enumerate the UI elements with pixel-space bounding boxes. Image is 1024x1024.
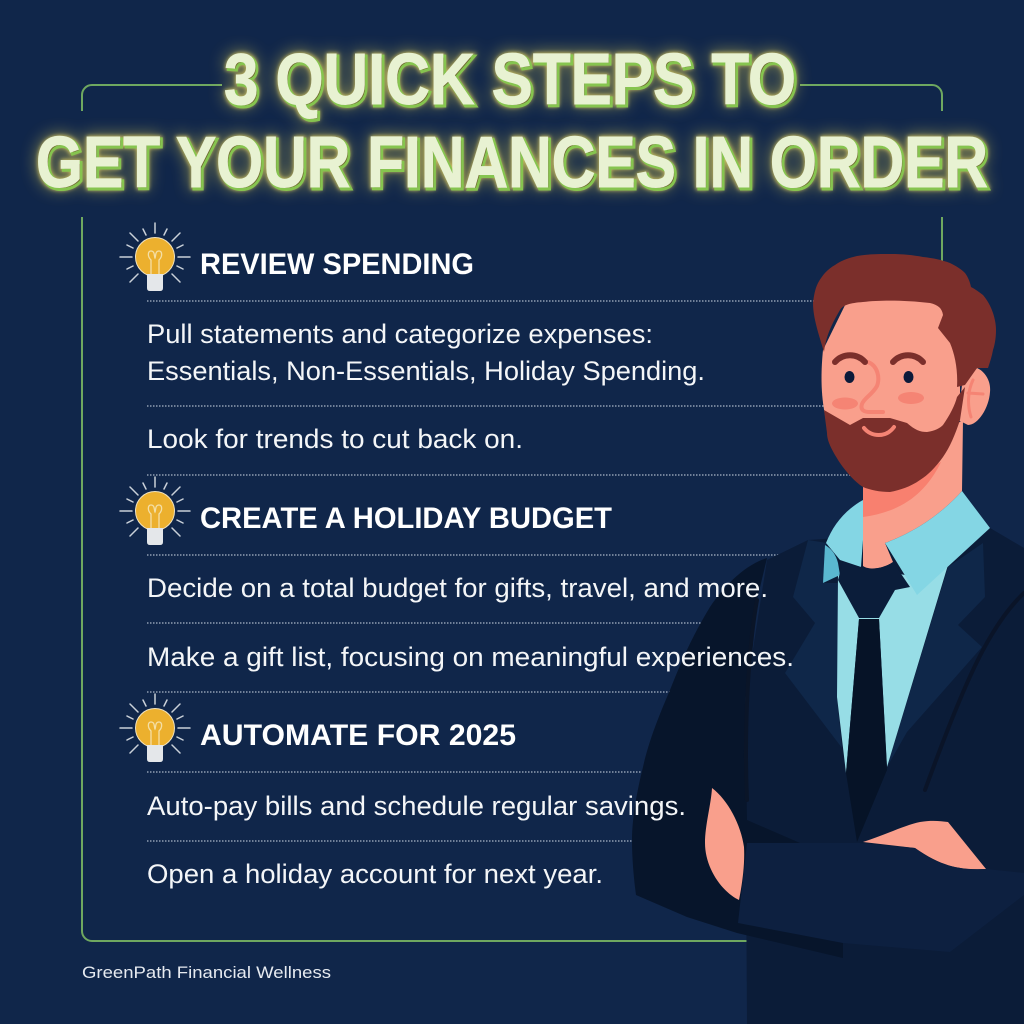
cheeks [832,392,924,410]
divider lines [147,301,880,841]
step 2 text: Decide on a total budget for gifts, travel, and more. [147,573,768,603]
hair [813,254,996,387]
content frame [82,85,942,941]
right hand [863,821,986,869]
suit seam lines [746,593,1024,800]
step 2 text [147,573,794,672]
step 2 heading: CREATE A HOLIDAY BUDGET [200,502,612,535]
step 1 text: Pull statements and categorize expenses: [147,319,653,349]
eyebrows [835,355,923,362]
title [36,40,990,205]
title: 3 QUICK STEPS TO [226,42,798,122]
step 1 text: Look for trends to cut back on. [147,424,523,454]
step 3 bulb icon [120,694,190,762]
neck shadow [863,462,941,517]
tie knot [838,562,910,618]
step 3 text [147,791,686,889]
forearm [738,843,1024,952]
eyes [844,371,914,383]
torso [745,528,1024,1024]
title: 3 QUICK STEPS TO [224,40,796,120]
face [822,295,960,460]
footer credit: GreenPath Financial Wellness [82,963,331,982]
neck [863,420,963,569]
left arm sleeve [632,558,843,958]
ear detail [968,380,983,417]
title: 3 QUICK STEPS TO [224,40,796,120]
man illustration [632,254,1024,1024]
tie [846,619,887,842]
shirt [837,565,948,773]
step 1 text: Essentials, Non-Essentials, Holiday Spending. [147,356,705,386]
step 1 heading: REVIEW SPENDING [200,248,474,281]
step 2 text: Make a gift list, focusing on meaningful experiences. [147,642,794,672]
left hand [705,788,744,900]
step 3 text: Open a holiday account for next year. [147,859,603,889]
left collar [826,500,863,567]
step 1 text [147,319,705,454]
ear [958,368,990,425]
step 3 text: Auto-pay bills and schedule regular savings. [147,791,686,821]
beard [824,387,965,492]
nose [861,362,883,412]
step 3 heading: AUTOMATE FOR 2025 [200,719,516,752]
step 2 bulb icon [120,477,190,545]
collar underside [823,545,840,583]
step 1 bulb icon [120,223,190,291]
title: 3 QUICK STEPS TO [225,41,797,121]
right collar [885,491,990,595]
lapels [785,540,985,767]
mouth [864,427,894,435]
